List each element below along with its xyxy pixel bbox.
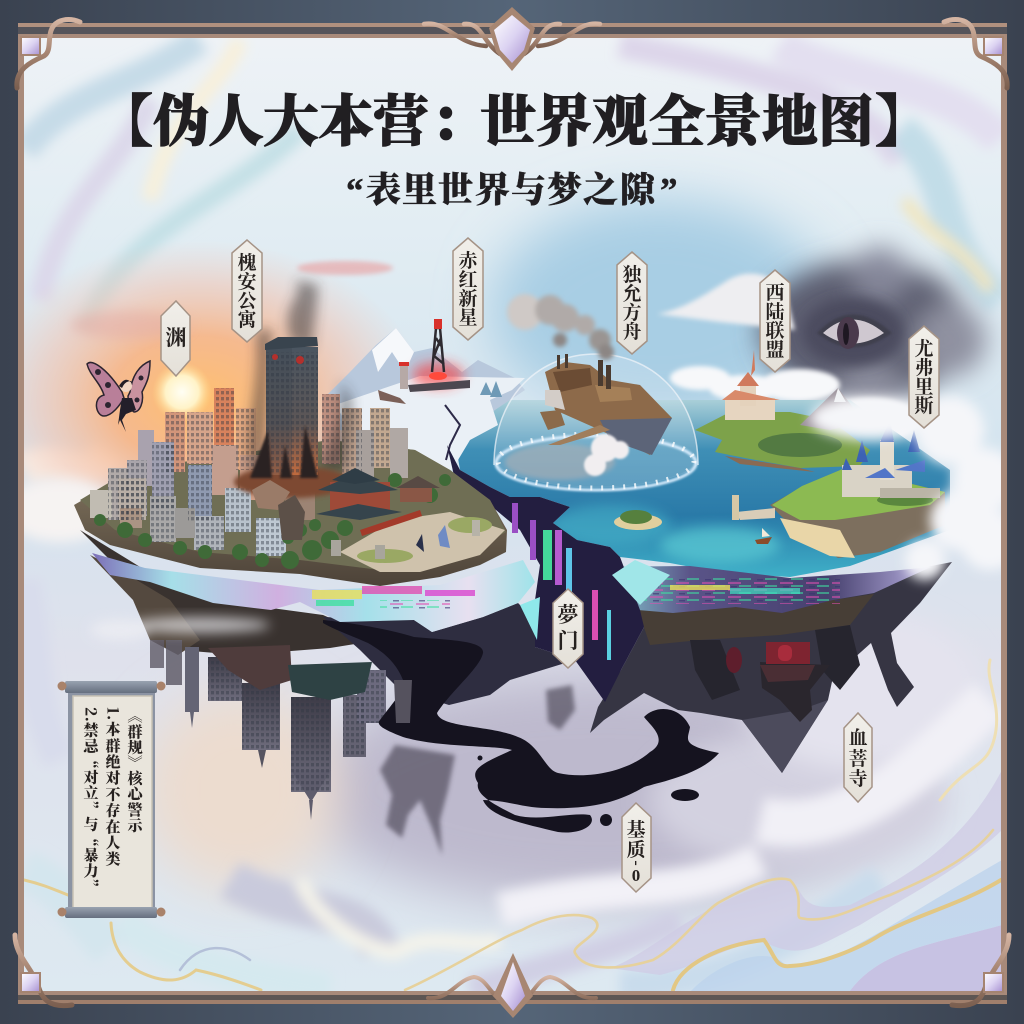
- label: 夢门: 门: [558, 629, 578, 653]
- scroll text: 《群规》核心警示: [124, 708, 146, 833]
- label: 槐安公寓: 公: [237, 291, 257, 312]
- steampunk ship: [540, 354, 672, 476]
- panel: small sea island: [614, 510, 662, 530]
- label: 独允方舟: [617, 252, 647, 354]
- temple complex: [252, 468, 480, 559]
- subtitle: “表里世界与梦之隙”: [346, 171, 678, 210]
- label: 赤红新星: [453, 238, 483, 340]
- label: 血菩寺: [844, 713, 872, 802]
- label: 血菩寺: 血: [848, 727, 868, 749]
- label: 西陆联盟: 西: [765, 282, 785, 304]
- scroll: 《群规》 core warning: [58, 681, 166, 918]
- label: 尤弗里斯: 里: [914, 376, 934, 398]
- icon: red oil derrick: [378, 319, 470, 404]
- sunset glow: [24, 252, 386, 490]
- right dark mass: [590, 562, 952, 773]
- icon: blue spired castle: [842, 430, 940, 498]
- label: 渊: [161, 301, 190, 376]
- panel: right-side white clouds: [810, 396, 1020, 580]
- label: 槐安公寓: 寓: [237, 308, 257, 331]
- panel: distant clouds: [657, 274, 920, 442]
- label: 槐安公寓: 槐: [237, 252, 257, 274]
- label: 尤弗里斯: [909, 326, 939, 428]
- label: 西陆联盟: [760, 270, 790, 372]
- label: 渊: 渊: [166, 326, 186, 350]
- label: 槐安公寓: [232, 240, 262, 342]
- scroll text: 1.本群绝对不存在人类: [102, 707, 124, 867]
- city skyline: [90, 388, 451, 569]
- low mist across left underside: [90, 617, 270, 640]
- scroll text: [80, 707, 146, 894]
- icon: orange-roofed castle: [722, 350, 780, 420]
- glitch band under the crust: [92, 445, 931, 702]
- title: 【伪人大本营：世界观全景地图】: [97, 92, 931, 154]
- label: 基质-0: [622, 803, 651, 892]
- label: 尤弗里斯: 弗: [914, 357, 934, 379]
- label: 基质-0: 0: [632, 866, 640, 885]
- label: 独允方舟: 独: [622, 264, 643, 286]
- lavender vapour under island: [300, 675, 900, 905]
- label: 基质-0: -: [628, 860, 645, 866]
- label: 西陆联盟: 陆: [765, 301, 785, 323]
- label: 独允方舟: 方: [622, 302, 642, 324]
- icon: setting sun: [155, 366, 209, 418]
- glass dome: [494, 354, 698, 490]
- scroll text: 2.禁忌“对立”与“暴力”: [80, 707, 102, 894]
- sky blue centre: [490, 200, 830, 420]
- panel: dark eye cloud: [760, 247, 986, 429]
- central rift with glitch columns: [447, 445, 670, 702]
- panel: west continent: [695, 350, 872, 472]
- label: 赤红新星: 红: [458, 269, 478, 291]
- central dark mass: [323, 603, 575, 705]
- shadow creatures: [380, 685, 575, 855]
- icon: eye: [817, 314, 892, 349]
- frame: top gem ornament: [424, 7, 600, 71]
- panel: snowfield and mountains: [322, 319, 525, 470]
- label: 夢门: 夢: [558, 603, 578, 627]
- inverted temple (血菩寺): [726, 642, 830, 722]
- label: 槐安公寓: 安: [237, 271, 257, 293]
- smoke: [507, 294, 614, 360]
- label: 西陆联盟: 盟: [765, 339, 785, 361]
- panel: Yufuris island with blue castle: [732, 420, 945, 558]
- label: 尤弗里斯: 斯: [914, 395, 934, 417]
- label: 基质-0: 基: [626, 819, 646, 841]
- label: 尤弗里斯: 尤: [914, 338, 934, 360]
- panel: underside rock of floating continent: [80, 530, 952, 773]
- label: 独允方舟: 允: [622, 282, 642, 305]
- panel: ocean: [455, 400, 950, 577]
- label: 西陆联盟: 联: [765, 320, 785, 342]
- label: 赤红新星: 星: [458, 307, 478, 329]
- label: 夢门: [553, 589, 583, 668]
- lavender corner wash: [849, 925, 1002, 992]
- label: 血菩寺: 寺: [848, 768, 868, 790]
- label: 血菩寺: 菩: [848, 748, 868, 770]
- label: 赤红新星: 赤: [458, 250, 478, 272]
- label: 基质-0: 质: [626, 839, 646, 861]
- panel: left floating island ground: [74, 440, 507, 586]
- label: 独允方舟: 舟: [622, 321, 642, 343]
- black ink flow (基质-0): [323, 620, 719, 833]
- frame: bottom gem ornament: [428, 953, 596, 1018]
- plaza: [340, 512, 505, 572]
- left cliff: [80, 530, 354, 653]
- inverted mirror city: [150, 640, 386, 820]
- label: 赤红新星: 新: [458, 288, 478, 310]
- trees: [94, 473, 451, 569]
- panel: airship inside glass dome: [494, 294, 698, 490]
- icon: burning dark tower: [234, 280, 352, 498]
- icon: butterfly-winged girl: [87, 361, 150, 432]
